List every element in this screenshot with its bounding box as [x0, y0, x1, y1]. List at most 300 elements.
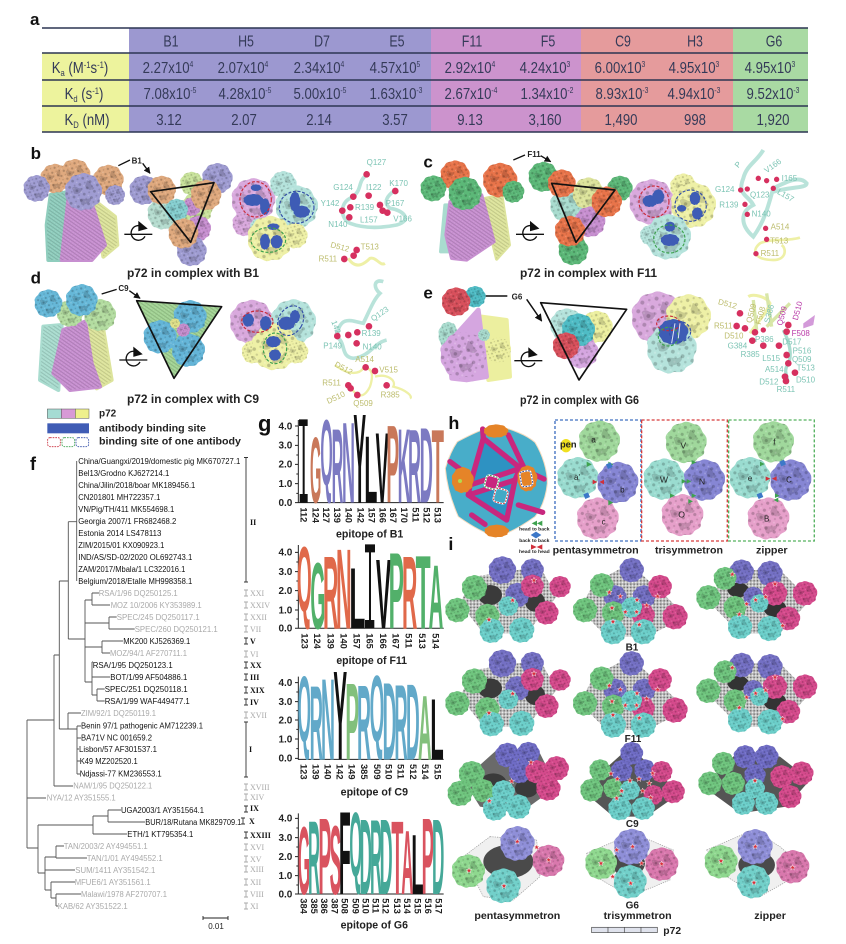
capsid icosahedron — [445, 424, 547, 537]
KD row: K — [64, 112, 73, 129]
taxon labels: Ndjassi-77 KM236553.1 — [80, 770, 162, 778]
logo: epitope of B1: 512 — [421, 507, 431, 523]
legend: p72 — [99, 409, 117, 420]
Ka row: 3 — [567, 59, 570, 69]
caption c: p72 in complex with F11 — [520, 266, 657, 280]
logo: epitope of F11: 511 — [404, 633, 414, 648]
ribbon and residues d: R385 — [381, 391, 400, 400]
logo: epitope of G6: epitope of G6 — [341, 919, 408, 931]
ribbon and residues e: F508 — [754, 305, 767, 326]
logo: epitope of F11: 166 — [378, 633, 388, 649]
zipper cluster: f — [773, 437, 776, 446]
logo: epitope of B1: V — [376, 413, 389, 525]
logo: epitope of F11: P — [389, 530, 404, 652]
logo: epitope of B1: 2.0 — [278, 460, 293, 471]
taxon labels: Lisbon/57 AF301537.1 — [79, 745, 158, 754]
Ka row: 4 — [341, 59, 344, 69]
genotype labels: XIII — [250, 865, 264, 874]
logo: epitope of C9: P — [345, 661, 359, 783]
taxon labels: MOZ/94/1 AF270711.1 — [110, 649, 188, 658]
ribbon and residues b: R511 — [319, 255, 338, 264]
KD row: 2.14 — [306, 112, 332, 129]
logo: epitope of B1: N — [342, 400, 355, 528]
side view c — [421, 160, 524, 260]
logo: epitope of C9: Y — [333, 644, 347, 786]
genotype labels: IX — [250, 804, 259, 813]
logo: epitope of G6: F — [339, 788, 351, 920]
row labels — [625, 642, 642, 912]
logo: epitope of F11: 139 — [325, 633, 335, 649]
KD row: 3.57 — [382, 112, 408, 129]
logo: epitope of C9: 0.0 — [278, 754, 293, 765]
ribbon and residues b: I122 — [366, 183, 382, 192]
ribbon and residues b: L157 — [360, 215, 378, 224]
panel a: kinetics table — [30, 10, 808, 132]
C9 zipper — [698, 745, 814, 815]
side view d — [35, 284, 116, 390]
ribbon and residues e: A514 — [765, 365, 784, 374]
logo: epitope of G6: D — [360, 797, 372, 917]
ribbon and residues c: N140 — [752, 210, 771, 219]
ribbon and residues d: D512 — [333, 360, 355, 377]
ribbon and residues b: Q127 — [367, 158, 387, 167]
row labels: G6 — [626, 901, 639, 912]
taxon labels: Benin 97/1 pathogenic AM712239.1 — [81, 722, 204, 730]
ribbon and residues d: Q509 — [353, 399, 373, 408]
logo: epitope of G6: 516 — [423, 898, 433, 914]
Ka row: ) — [104, 60, 108, 77]
Kd row: (s — [78, 86, 92, 103]
genotype labels: II — [250, 518, 256, 527]
logo: epitope of G6: 3.0 — [278, 833, 293, 844]
logo: epitope of F11: 157 — [351, 633, 361, 649]
genotype labels: XXIV — [250, 601, 270, 610]
text: A — [418, 677, 432, 779]
logo: epitope of C9: R — [310, 664, 323, 782]
pentasymmetron cluster: a' — [574, 473, 580, 482]
Ka row: 2.34x10 — [294, 60, 341, 77]
panel letter i: i — [448, 534, 453, 554]
logo: epitope of F11: R — [402, 535, 417, 651]
row labels: F11 — [625, 734, 642, 745]
panel d: p72 with C9 — [31, 268, 411, 408]
logo: epitope of C9: Q — [298, 657, 311, 762]
genotype labels: XX — [250, 661, 262, 670]
taxon labels: RSA/1/99 WAF449477.1 — [105, 697, 190, 706]
ribbon and residues e: Q509 — [775, 305, 789, 327]
logo: epitope of B1: 513 — [432, 507, 442, 523]
logo: epitope of F11: 4.0 — [278, 548, 293, 559]
rotation icon d — [119, 348, 147, 366]
logo: epitope of C9: Q — [370, 657, 384, 763]
taxon labels: ZIM/92/1 DQ250119.1 — [81, 709, 157, 718]
taxon labels: SUM/1411 AY351542.1 — [75, 866, 156, 875]
B1 label and arrows: B1 — [132, 156, 142, 165]
taxon labels: MFUE6/1 AY351561.1 — [75, 878, 151, 887]
text: T — [432, 409, 444, 526]
logo: epitope of G6: 512 — [381, 898, 391, 914]
logo: epitope of G6: Q — [349, 793, 362, 897]
genotype brackets — [241, 458, 248, 838]
logo: epitope of B1: 511 — [410, 507, 420, 522]
ribbon and residues b: T513 — [361, 242, 379, 251]
F11 pentasymmetron — [445, 650, 571, 736]
logo: epitope of F11: 123 — [300, 633, 310, 649]
C9 label and arrows — [102, 284, 140, 298]
genotype labels: VI — [250, 650, 259, 659]
logo: epitope of G6: 517 — [433, 898, 443, 914]
C9 pentasymmetron — [448, 742, 569, 821]
Kd row: 5.00x10 — [294, 86, 340, 103]
table header row: F11 — [462, 32, 482, 50]
column labels: trisymmetron — [604, 911, 672, 922]
logo: epitope of G6: G — [298, 808, 310, 915]
Ka row: 2.27x10 — [143, 60, 190, 77]
logo: epitope of F11: 513 — [417, 633, 427, 649]
Kd row: -5 — [265, 85, 271, 95]
text: D — [420, 405, 433, 526]
logo: epitope of C9: 3.0 — [278, 697, 293, 708]
logo: epitope of F11: R — [323, 535, 338, 651]
rotation icon e — [514, 349, 542, 367]
G6 pentasymmetron — [452, 826, 564, 903]
ribbon and residues d: R139 — [362, 329, 381, 338]
Kd row: 4.94x10 — [668, 86, 714, 103]
Kd row: 8.93x10 — [596, 86, 642, 103]
h labels — [553, 545, 788, 556]
panel letter d: d — [31, 268, 41, 287]
taxon labels: K49 MZ202520.1 — [80, 757, 138, 766]
logo: epitope of C9: 509 — [372, 764, 382, 780]
ribbon and residues c: V166 — [763, 157, 784, 175]
logo: epitope of B1: 167 — [388, 507, 398, 523]
taxon labels: SPEC/245 DQ250117.1 — [117, 613, 200, 622]
ribbon and residues e: Q509 — [792, 355, 812, 364]
F11 zipper — [696, 653, 817, 734]
taxon labels: Bel13/Grodno KJ627214.1 — [78, 469, 170, 478]
ribbon and residues c: I165 — [782, 174, 798, 183]
B1 label and arrows — [118, 156, 150, 173]
taxon labels: Belgium/2018/Etalle MH998358.1 — [78, 577, 193, 586]
logo: epitope of G6: S — [330, 805, 341, 915]
ribbon and residues b: D512 — [329, 240, 351, 254]
Kd row: 2.67x10 — [445, 86, 491, 103]
panel letter a: a — [30, 10, 40, 29]
Kd row — [65, 85, 799, 104]
F11 trisymmetron — [573, 651, 688, 738]
h labels: zipper — [756, 545, 788, 556]
logo: epitope of G6: R — [370, 797, 382, 917]
logo: epitope of G6: 513 — [392, 898, 402, 914]
taxon labels: UGA2003/1 AY351564.1 — [121, 806, 205, 815]
taxon labels: IND/AS/SD-02/2020 OL692743.1 — [78, 553, 193, 562]
Ka row: 4 — [492, 59, 495, 69]
ribbon and residues b: R139 — [355, 203, 375, 212]
Kd row: K — [65, 86, 73, 103]
taxon labels: CN201801 MH722357.1 — [78, 493, 161, 502]
taxon labels: SPEC/260 DQ250121.1 — [135, 625, 218, 634]
logo: epitope of G6: 511 — [370, 898, 380, 913]
genotype labels: XXIII — [250, 831, 271, 840]
row labels: B1 — [626, 642, 639, 653]
G6 label and arrows: G6 — [512, 292, 523, 301]
taxon labels — [47, 457, 242, 911]
genotype labels: VIII — [250, 890, 264, 899]
taxon labels: SPEC/251 DQ250118.1 — [105, 685, 188, 694]
logo: epitope of G6: 510 — [361, 898, 371, 914]
ribbon and residues e: T513 — [797, 363, 815, 372]
logo: epitope of F11: 1.0 — [278, 605, 293, 616]
logo: epitope of G6: P — [318, 796, 331, 918]
Ka row: 3 — [792, 59, 795, 69]
pentasymmetron cluster: b — [620, 485, 625, 494]
logo: epitope of G6: 509 — [350, 898, 360, 914]
ribbon and residues d: A514 — [355, 355, 375, 364]
text: T — [416, 534, 431, 651]
taxon labels: China/Guangxi/2019/domestic pig MK670727.1 — [78, 457, 241, 466]
footprint c — [629, 173, 716, 259]
rotation icon c — [516, 222, 544, 240]
ribbon and residues e: S386 — [763, 303, 776, 324]
Ka row: 4.57x10 — [370, 60, 417, 77]
logo: epitope of G6: L — [411, 817, 424, 913]
logo: epitope of F11: V — [376, 539, 391, 650]
Kd row: -5 — [340, 85, 346, 95]
Kd row: -3 — [642, 85, 648, 95]
tree branches — [27, 461, 145, 906]
ribbon and residues b: K170 — [389, 179, 409, 188]
trisymmetron cluster: O — [678, 509, 685, 519]
logo: epitope of G6: R — [308, 800, 320, 917]
C9 label and arrows: C9 — [118, 284, 129, 293]
text: L — [430, 680, 444, 778]
Ka row: 2.07x10 — [218, 60, 265, 77]
side view b — [24, 159, 125, 260]
genotype labels: III — [250, 673, 259, 682]
genotype labels: XV — [250, 855, 262, 864]
logo: epitope of B1: epitope of B1 — [336, 528, 403, 540]
taxon labels: China/Jilin/2018/boar MK189456.1 — [78, 481, 196, 490]
ribbon and residues b: P167 — [386, 199, 405, 208]
logo: epitope of B1: 1.0 — [278, 479, 293, 490]
Kd row: 9.52x10 — [747, 86, 793, 103]
table header row: C9 — [615, 32, 631, 50]
table header row: G6 — [766, 32, 782, 50]
Kd row: -4 — [491, 85, 497, 95]
ribbon and residues d: R511 — [322, 378, 341, 387]
logo: epitope of F11: 514 — [431, 633, 441, 650]
logo: epitope of C9: 514 — [420, 764, 430, 780]
G6 label and arrows — [486, 292, 542, 321]
logo: epitope of G6: 2.0 — [278, 852, 293, 863]
h labels: pentasymmetron — [553, 545, 639, 556]
text: A — [429, 547, 443, 648]
column labels — [474, 911, 786, 922]
Ka row — [52, 59, 795, 78]
Ka row: (M — [65, 60, 84, 77]
KD row: 3.12 — [156, 112, 182, 129]
genotype labels: XII — [250, 878, 261, 887]
C9 trisymmetron — [580, 742, 685, 820]
Kd row: -3 — [714, 85, 720, 95]
logo: epitope of C9: R — [394, 661, 408, 782]
taxon labels: TAN/1/01 AY494552.1 — [87, 854, 163, 863]
ribbon and residues c: P — [733, 160, 743, 170]
panel e: p72 with G6 — [423, 284, 816, 394]
ribbon and residues c: L157 — [776, 187, 796, 204]
KD row — [64, 112, 789, 130]
taxon labels: TAN/2003/2 AY494551.1 — [64, 842, 148, 851]
taxon labels: BA71V NC 001659.2 — [81, 734, 153, 742]
logo: epitope of F11: epitope of F11 — [336, 655, 407, 667]
logo: epitope of C9: 139 — [310, 764, 320, 780]
text: P — [422, 796, 434, 918]
genotype labels: XVIII — [250, 783, 270, 792]
ribbon and residues e: G384 — [728, 341, 748, 350]
logo: epitope of B1: L — [364, 417, 377, 524]
logo: epitope of C9: 512 — [408, 764, 418, 780]
logo: epitope of C9 — [278, 644, 444, 799]
panel c: p72 with F11 — [421, 150, 807, 265]
Ka row: 4 — [265, 59, 268, 69]
Kd row: 1.34x10 — [521, 86, 567, 103]
Kd row: -5 — [190, 85, 196, 95]
taxon labels: Malawi/1978 AF270707.1 — [81, 890, 168, 899]
table header row: H3 — [687, 32, 703, 50]
ribbon and residues e: L515 — [762, 354, 781, 363]
Kd row: -3 — [416, 85, 422, 95]
panel letter e: e — [423, 284, 433, 303]
logo: epitope of F11: Q — [297, 527, 312, 631]
dashed interface boxes — [555, 420, 814, 541]
ribbon and residues c: Q123 — [750, 191, 770, 200]
logo: epitope of C9: 140 — [322, 764, 332, 780]
ribbon and residues d: N140 — [363, 342, 382, 351]
side view e — [439, 286, 511, 382]
ribbon and residues b: V166 — [393, 215, 413, 224]
genotype labels: XXII — [250, 613, 267, 622]
Kd row: d — [73, 93, 78, 104]
panel i: antibody docking on capsid — [445, 534, 817, 937]
KD row: D — [73, 119, 79, 130]
logo: epitope of G6: 385 — [309, 898, 319, 914]
column labels: pentasymmetron — [474, 911, 560, 922]
logo: epitope of G6: 1.0 — [278, 871, 293, 882]
G6 zipper — [705, 829, 809, 898]
taxon labels: RSA/1/96 DQ250125.1 — [99, 589, 178, 598]
legend: binding site of one antibody — [99, 436, 241, 447]
logo: epitope of B1: 142 — [355, 507, 365, 523]
Ka row: 4 — [190, 59, 193, 69]
ribbon and residues e: D512 — [717, 297, 738, 311]
genotype labels: XIX — [250, 686, 265, 695]
logo: epitope of G6: 0.0 — [278, 889, 293, 900]
Kd row: ) — [99, 86, 103, 103]
panel f: phylogenetic tree — [27, 454, 271, 931]
genotype labels: V — [250, 637, 256, 646]
taxon labels: BOT/1/99 AF504886.1 — [110, 673, 188, 682]
interface key: back to back — [519, 538, 550, 544]
logo: epitope of B1: 3.0 — [278, 441, 293, 452]
ribbon and residues e: D512 — [759, 377, 779, 386]
panel letter h: h — [448, 413, 459, 433]
ribbon and residues e: R385 — [741, 350, 760, 359]
taxon labels: Georgia 2007/1 FR682468.2 — [78, 517, 177, 526]
table header row: D7 — [314, 32, 330, 50]
ribbon and residues b: Y142 — [321, 199, 340, 208]
column labels: zipper — [754, 911, 786, 922]
panel letter g: g — [258, 411, 271, 436]
ribbon and residues e: D517 — [782, 337, 802, 346]
pentasymmetron cluster: c — [602, 517, 606, 526]
table header row: H5 — [238, 32, 254, 50]
scale bar: 0.01 — [208, 922, 224, 931]
ribbon and residues e: R511 — [714, 322, 733, 331]
logo: epitope of B1: 4.0 — [278, 421, 293, 432]
KD row: (nM) — [79, 112, 110, 129]
table header row — [163, 32, 782, 50]
logo: epitope of B1 — [278, 388, 444, 540]
logo: epitope of F11 — [278, 526, 444, 667]
logo: epitope of B1: 127 — [321, 507, 331, 523]
table header row: B1 — [163, 32, 179, 50]
logo: epitope of G6: 386 — [319, 898, 329, 914]
logo: epitope of G6: 508 — [340, 898, 350, 914]
trisymmetron cluster: W — [660, 475, 669, 485]
p72 scale bar: p72 — [663, 926, 681, 937]
logo: epitope of G6: 514 — [402, 898, 412, 915]
taxon labels: VN/Pig/TH/411 MK554698.1 — [78, 505, 175, 514]
logo: epitope of C9: epitope of C9 — [341, 787, 408, 799]
Ka row: 5 — [417, 59, 420, 69]
zipper cluster: C — [786, 475, 792, 484]
table background colours — [42, 28, 808, 132]
logo: epitope of B1: 124 — [310, 507, 320, 524]
genotype labels: XVI — [250, 843, 265, 852]
KD row: 2.07 — [231, 112, 257, 129]
genotype labels: VII — [250, 625, 261, 634]
Kd row: -3 — [793, 85, 799, 95]
Kd row: -1 — [92, 85, 99, 96]
KD row: 1,490 — [605, 112, 637, 129]
Ka row: 6.00x10 — [595, 60, 642, 77]
logo: epitope of B1: 0.0 — [278, 498, 293, 509]
Ka row: 4.95x10 — [745, 60, 792, 77]
ribbon and residues d — [322, 281, 411, 408]
ribbon and residues b — [319, 158, 413, 265]
ribbon and residues e: D510 — [796, 376, 816, 385]
taxon labels: NYA/12 AY351555.1 — [47, 794, 116, 802]
ribbon and residues d: Q123 — [369, 304, 391, 323]
genotype labels: XXI — [250, 589, 265, 598]
logo: epitope of C9: 4.0 — [278, 678, 293, 689]
ribbon and residues d: 142 — [329, 319, 343, 335]
KD row: 9.13 — [457, 112, 483, 129]
table header row: F5 — [541, 32, 555, 50]
logo: epitope of B1: 139 — [332, 507, 342, 523]
pentasymmetron cluster — [557, 420, 638, 539]
Ka row: a — [60, 67, 65, 78]
genotype labels: IV — [250, 698, 259, 707]
G6 trisymmetron — [585, 829, 678, 898]
ribbon and residues c: A514 — [771, 222, 790, 231]
logo: epitope of C9: 515 — [432, 764, 442, 780]
F11 label and arrows: F11 — [527, 150, 541, 159]
ribbon and residues c — [715, 150, 807, 260]
top view c — [529, 162, 633, 265]
genotype labels: I — [249, 745, 252, 754]
logo: epitope of F11: 167 — [391, 633, 401, 649]
